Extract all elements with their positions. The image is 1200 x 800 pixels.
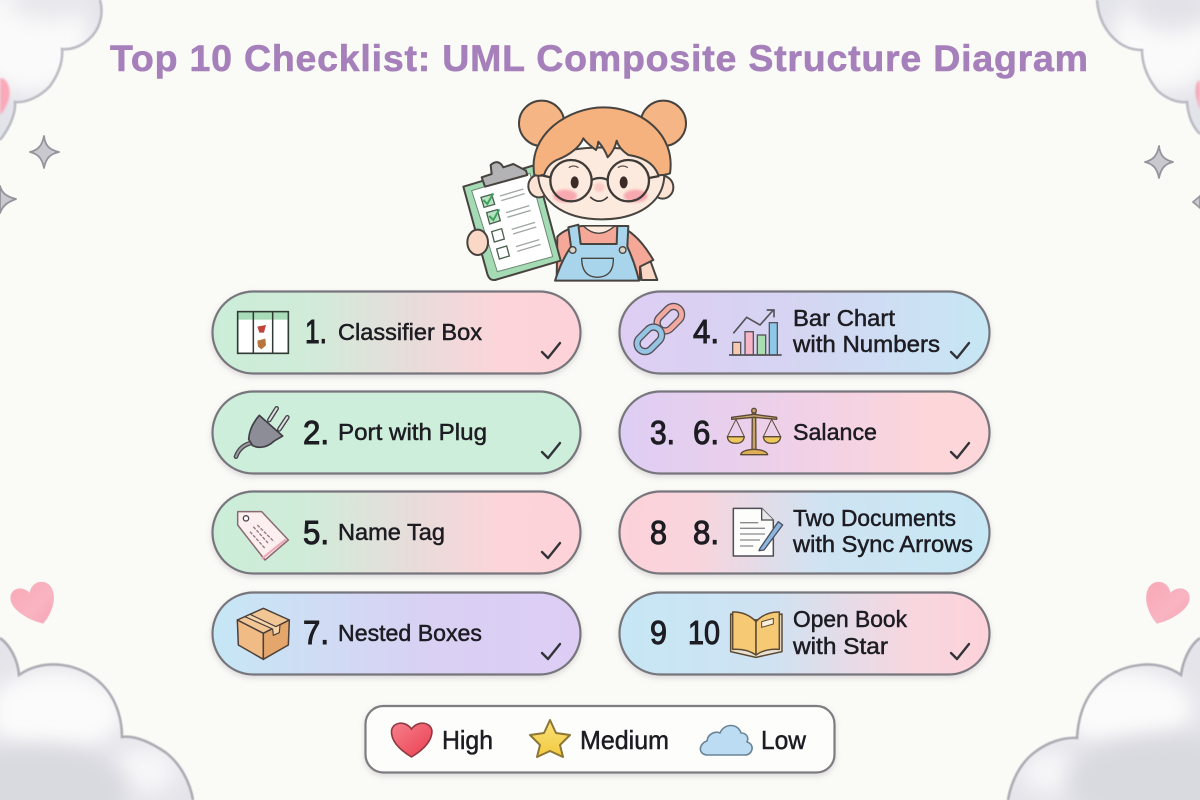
cloud: bottom right corner: [1000, 630, 1200, 800]
ears: [528, 175, 673, 199]
icon: bar chart: [729, 310, 782, 355]
icon: tag: [238, 512, 288, 560]
number: 2.: [303, 414, 329, 451]
check mark: [542, 443, 560, 458]
text: Low: Low: [761, 725, 806, 755]
numbers: 10: [688, 614, 720, 651]
number: 1.: [305, 313, 327, 350]
icon: document with pencil: [733, 508, 783, 556]
title: Top 10 Checklist: UML Composite Structure Diagram: [110, 37, 1088, 79]
checklist item 2: Port with Plug: [212, 392, 580, 474]
hand: [467, 230, 488, 255]
arm: [640, 262, 657, 280]
icon: red heart: [391, 723, 432, 757]
clipboard: [463, 162, 561, 280]
eyes and mouth: [569, 166, 628, 201]
label: Bar Chart: [793, 305, 895, 331]
label: Open Book: [793, 606, 907, 632]
label: with Star: [792, 633, 888, 659]
label: [792, 505, 973, 557]
label: Name Tag: [338, 519, 445, 545]
numbers: [650, 414, 719, 451]
text: Medium: Medium: [580, 725, 669, 755]
checklist item 9 and 10: Open Book with Star: [620, 592, 990, 674]
check mark: [951, 443, 969, 458]
numbers: [650, 514, 719, 551]
label: Port with Plug: [338, 419, 487, 445]
icon: plug: [236, 408, 287, 457]
label: with Numbers: [792, 331, 940, 357]
check mark: [951, 343, 969, 358]
sparkle: right edge: [1193, 196, 1200, 208]
cloud: top right corner: [1090, 0, 1200, 140]
icon: scales: [727, 408, 781, 455]
numbers: 8.: [693, 514, 719, 551]
cloud: top left corner: [0, 0, 110, 145]
icon: yellow star: [530, 720, 570, 757]
icon: blue cloud: [700, 726, 752, 755]
checklist item 1: Classifier Box: [212, 292, 580, 374]
number: 5.: [303, 514, 329, 551]
checklist item 4: Bar Chart with Numbers: [620, 292, 990, 374]
illustration: girl holding clipboard: [463, 101, 686, 281]
checklist item 8: Two Documents with Sync Arrows: [620, 492, 990, 574]
label: Salance: [793, 419, 877, 445]
numbers: 9: [650, 614, 667, 651]
overalls: [555, 225, 639, 281]
numbers: [650, 614, 720, 651]
glasses: [541, 160, 659, 201]
heart: top right: [1195, 80, 1200, 110]
check mark: [542, 543, 560, 558]
icon: cardboard box: [237, 608, 289, 659]
numbers: 3.: [650, 414, 675, 451]
icon: table: [238, 312, 288, 353]
hair buns: [519, 101, 686, 146]
label: Nested Boxes: [338, 620, 482, 646]
heart: bottom right: [1147, 582, 1189, 623]
label: [792, 305, 940, 357]
icon: open book: [731, 612, 782, 657]
face: [538, 147, 664, 219]
sparkle: left edge: [0, 186, 16, 213]
sparkle: right large: [1145, 146, 1173, 178]
hair fringe: [534, 107, 671, 176]
heart: bottom left: [11, 582, 53, 623]
cheeks and nose: [553, 183, 648, 202]
label: [792, 606, 907, 659]
sparkle: left large: [30, 136, 59, 168]
numbers: 6.: [693, 414, 719, 451]
check mark: [542, 343, 560, 358]
number: 7.: [303, 614, 329, 651]
checklist item 7: Nested Boxes: [212, 592, 580, 674]
checklist item 3 and 6: Balance: [620, 392, 990, 474]
checklist item 5: Name Tag: [212, 492, 580, 574]
check mark: [542, 644, 560, 659]
label: Classifier Box: [338, 319, 482, 345]
shirt: [557, 226, 653, 280]
label: Two Documents: [793, 505, 956, 531]
legend: [366, 706, 834, 772]
label: with Sync Arrows: [792, 531, 973, 557]
collar: [584, 227, 614, 233]
icon: chain link: [634, 303, 685, 355]
text: High: High: [442, 725, 493, 755]
cloud: bottom left corner: [0, 630, 200, 800]
number: 4.: [693, 313, 719, 350]
heart: top left: [0, 78, 10, 115]
check mark: [951, 644, 969, 659]
numbers: 8: [650, 514, 667, 551]
